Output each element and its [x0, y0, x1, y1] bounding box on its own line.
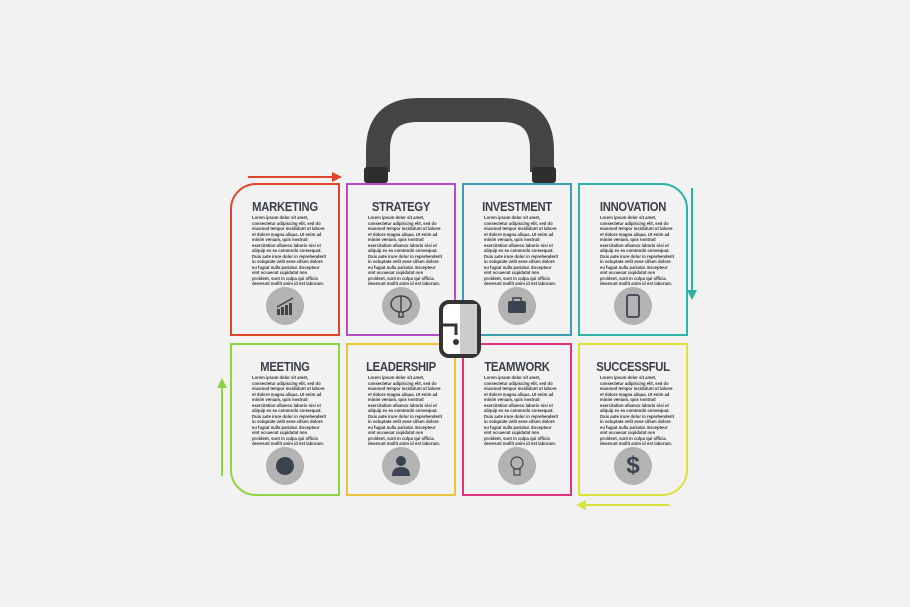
icon: person	[382, 447, 420, 485]
icon: dollar	[614, 447, 652, 485]
panel: marketing: MARKETING	[252, 200, 318, 214]
panel: investment	[462, 183, 572, 336]
panel: strategy: STRATEGY	[372, 200, 430, 214]
arrow: green up	[217, 378, 227, 476]
panel: successful	[578, 343, 688, 496]
arrow: teal down	[688, 188, 697, 300]
arrow: red top	[248, 172, 342, 182]
icon: briefcase	[498, 287, 536, 325]
panel: strategy	[346, 183, 456, 336]
panel: leadership: Lorem ipsum dolor sit amet, consectetur adipiscing elit, sed do eiusmod tempor incididunt ut labore et dolore magna aliqua. Ut enim ad minim veniam, quis nostrud exercitation ullamco laboris nisi ut aliquip ex ea commodo consequat. Duis aute irure dolor in reprehenderit in voluptate velit esse cillum dolore eu fugiat nulla pariatur. Excepteur sint occaecat cupidatat non proident, sunt in culpa qui officia deserunt mollit anim id est laborum.	[368, 375, 442, 446]
panel: strategy: Lorem ipsum dolor sit amet, consectetur adipiscing elit, sed do eiusmod tempor incididunt ut labore et dolore magna aliqua. Ut enim ad minim veniam, quis nostrud exercitation ullamco laboris nisi ut aliquip ex ea commodo consequat. Duis aute irure dolor in reprehenderit in voluptate velit esse cillum dolore eu fugiat nulla pariatur. Excepteur sint occaecat cupidatat non proident, sunt in culpa qui officia deserunt mollit anim id est laborum.	[368, 215, 442, 286]
panel: marketing: Lorem ipsum dolor sit amet, consectetur adipiscing elit, sed do eiusmod tempor incididunt ut labore et dolore magna aliqua. Ut enim ad minim veniam, quis nostrud exercitation ullamco laboris nisi ut aliquip ex ea commodo consequat. Duis aute irure dolor in reprehenderit in voluptate velit esse cillum dolore eu fugiat nulla pariatur. Excepteur sint occaecat cupidatat non proident, sunt in culpa qui officia deserunt mollit anim id est laborum.	[252, 215, 326, 286]
panel: successful: Lorem ipsum dolor sit amet, consectetur adipiscing elit, sed do eiusmod tempor incididunt ut labore et dolore magna aliqua. Ut enim ad minim veniam, quis nostrud exercitation ullamco laboris nisi ut aliquip ex ea commodo consequat. Duis aute irure dolor in reprehenderit in voluptate velit esse cillum dolore eu fugiat nulla pariatur. Excepteur sint occaecat cupidatat non proident, sunt in culpa qui officia deserunt mollit anim id est laborum.	[600, 375, 674, 446]
panel: meeting	[230, 343, 340, 496]
panel: leadership	[346, 343, 456, 496]
panel: teamwork	[462, 343, 572, 496]
panel: leadership: LEADERSHIP	[366, 360, 436, 374]
panel: marketing	[230, 183, 340, 336]
panel: successful: SUCCESSFUL	[596, 360, 670, 374]
panel: innovation	[578, 183, 688, 336]
icon: phone	[614, 287, 652, 325]
icon: chart	[266, 287, 304, 325]
panel: teamwork: TEAMWORK	[484, 360, 550, 374]
panel: innovation: INNOVATION	[600, 200, 666, 214]
icon: lock	[439, 300, 481, 358]
panel: innovation: Lorem ipsum dolor sit amet, consectetur adipiscing elit, sed do eiusmod tempor incididunt ut labore et dolore magna aliqua. Ut enim ad minim veniam, quis nostrud exercitation ullamco laboris nisi ut aliquip ex ea commodo consequat. Duis aute irure dolor in reprehenderit in voluptate velit esse cillum dolore eu fugiat nulla pariatur. Excepteur sint occaecat cupidatat non proident, sunt in culpa qui officia deserunt mollit anim id est laborum.	[600, 215, 674, 286]
panel: investment: Lorem ipsum dolor sit amet, consectetur adipiscing elit, sed do eiusmod tempor incididunt ut labore et dolore magna aliqua. Ut enim ad minim veniam, quis nostrud exercitation ullamco laboris nisi ut aliquip ex ea commodo consequat. Duis aute irure dolor in reprehenderit in voluptate velit esse cillum dolore eu fugiat nulla pariatur. Excepteur sint occaecat cupidatat non proident, sunt in culpa qui officia deserunt mollit anim id est laborum.	[484, 215, 558, 286]
icon: bulb	[498, 447, 536, 485]
icon: dollar: $	[626, 452, 640, 479]
panel: meeting: MEETING	[260, 360, 310, 374]
icon: globe	[266, 447, 304, 485]
panel: teamwork: Lorem ipsum dolor sit amet, consectetur adipiscing elit, sed do eiusmod tempor incididunt ut labore et dolore magna aliqua. Ut enim ad minim veniam, quis nostrud exercitation ullamco laboris nisi ut aliquip ex ea commodo consequat. Duis aute irure dolor in reprehenderit in voluptate velit esse cillum dolore eu fugiat nulla pariatur. Excepteur sint occaecat cupidatat non proident, sunt in culpa qui officia deserunt mollit anim id est laborum.	[484, 375, 558, 446]
panel: meeting: Lorem ipsum dolor sit amet, consectetur adipiscing elit, sed do eiusmod tempor incididunt ut labore et dolore magna aliqua. Ut enim ad minim veniam, quis nostrud exercitation ullamco laboris nisi ut aliquip ex ea commodo consequat. Duis aute irure dolor in reprehenderit in voluptate velit esse cillum dolore eu fugiat nulla pariatur. Excepteur sint occaecat cupidatat non proident, sunt in culpa qui officia deserunt mollit anim id est laborum.	[252, 375, 326, 446]
panel: investment: INVESTMENT	[482, 200, 552, 214]
icon: brain	[382, 287, 420, 325]
arrow: lime left	[576, 500, 670, 510]
